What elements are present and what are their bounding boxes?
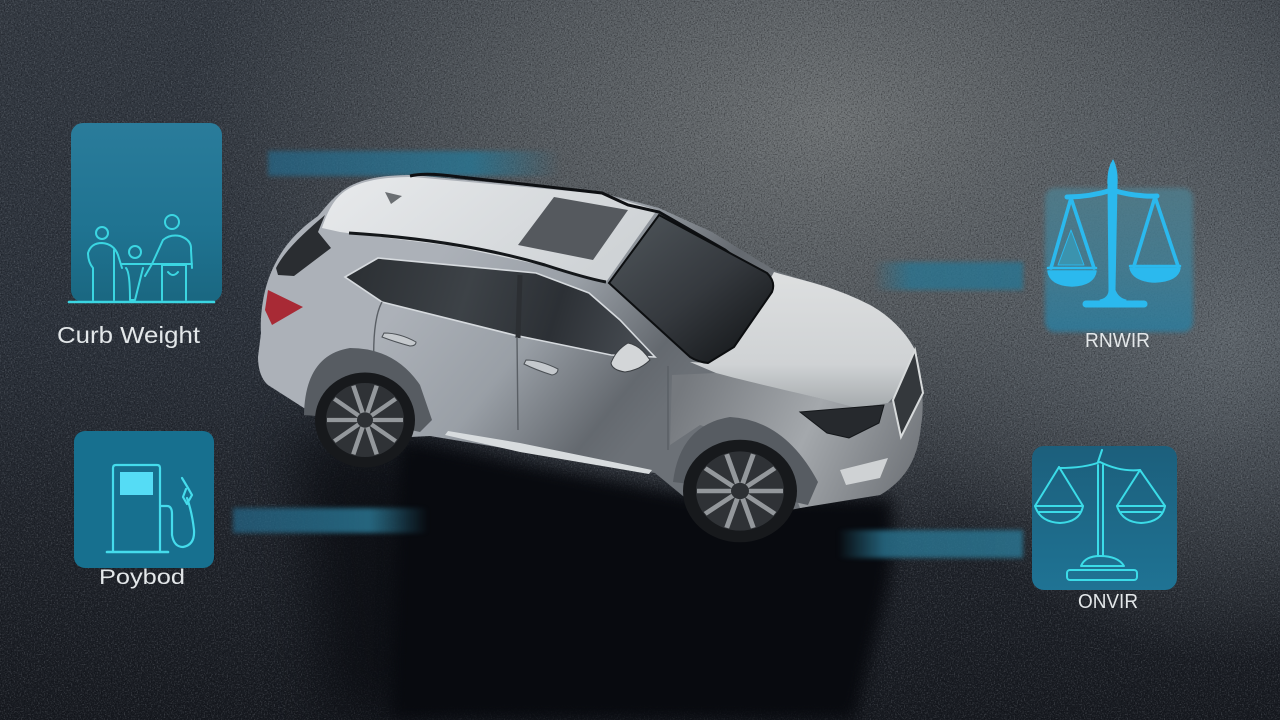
roof [322, 177, 657, 282]
front hub [731, 483, 749, 499]
roof rail top [410, 174, 770, 285]
panel: payload [74, 431, 214, 589]
rear door handle [382, 333, 416, 346]
label: payload: Poybod [99, 566, 185, 589]
grille [893, 350, 923, 437]
icon: fuel pump [107, 465, 194, 552]
icon: balance scale, outline [1035, 450, 1165, 580]
label: onvir: ONVIR [1078, 591, 1138, 613]
sill highlight [445, 431, 652, 474]
panel background [1032, 446, 1177, 590]
label: anwir: RNWIR [1085, 330, 1150, 352]
front rim [696, 451, 784, 531]
front spokes [697, 454, 783, 528]
rear hatch window [276, 215, 331, 276]
panel: bottom-right scale [1032, 446, 1177, 613]
sunroof [518, 197, 628, 260]
front wheel [683, 440, 797, 542]
rear wheel arch [304, 348, 432, 432]
rear hub [357, 412, 373, 428]
roof rail side [349, 233, 606, 282]
side windows [345, 258, 655, 357]
door pillar [518, 275, 520, 338]
panel: curb weight [57, 123, 222, 348]
front wheel arch [673, 417, 818, 505]
rear logo [385, 192, 402, 204]
tail light [265, 290, 303, 325]
connector bar: bottom-right scale [838, 530, 1023, 558]
side mirror [611, 343, 650, 372]
hood [690, 272, 916, 408]
label: curb weight: Curb Weight [57, 322, 201, 348]
panel background [71, 123, 222, 302]
connector bar: top-right scale [873, 262, 1023, 290]
front tyre [683, 440, 797, 542]
front door handle [524, 360, 558, 375]
lower air intake [840, 458, 888, 485]
connector bar: payload [233, 508, 428, 533]
rear rim [326, 383, 404, 457]
headlight [800, 405, 884, 438]
panel background [1045, 188, 1193, 332]
rear tyre [315, 372, 415, 468]
icon: family figures [69, 215, 214, 302]
icon: balance scale, solid [1048, 160, 1180, 307]
car: silver SUV from above [258, 174, 923, 542]
connector bar: curb weight [268, 151, 560, 176]
windshield [609, 215, 773, 363]
car shadow on ground [290, 430, 894, 720]
panel: top-right scale [1045, 160, 1193, 352]
rear wheel [315, 372, 415, 468]
rear spokes [327, 386, 403, 454]
door seams [374, 302, 668, 450]
front fender and bumper [670, 373, 923, 508]
car body [258, 175, 923, 512]
panel background [74, 431, 214, 568]
